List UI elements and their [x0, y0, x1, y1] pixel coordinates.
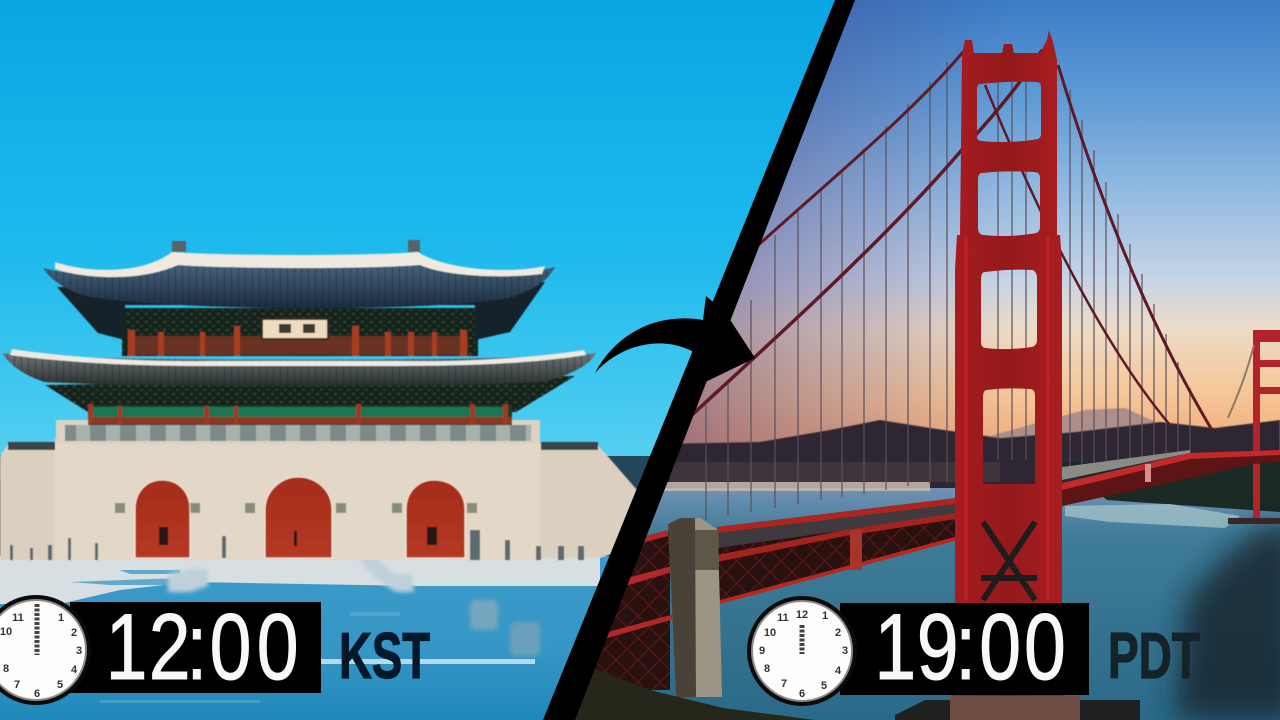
digital time 12:00: 12:00 — [106, 595, 299, 700]
panel: Seoul daytime scene — [0, 0, 860, 720]
clock icon: 8 — [764, 663, 770, 675]
stone parapet — [56, 420, 540, 444]
tower base and rocks — [895, 696, 1140, 720]
digital time background — [70, 602, 321, 693]
clock icon: 1 — [58, 612, 64, 624]
far bridge tower — [1228, 330, 1280, 524]
clock icon: 11 — [777, 612, 789, 624]
side walls — [0, 444, 637, 560]
distant dark building — [0, 455, 700, 490]
cross bracing — [981, 522, 1037, 600]
white lower ridge — [10, 349, 586, 366]
upper storey — [122, 308, 478, 356]
clock icon: 2 — [835, 627, 841, 639]
zone label PDT: PDT — [1108, 619, 1200, 692]
time panel: San Francisco — [747, 595, 1200, 706]
concrete pier — [668, 518, 722, 697]
clock icon: 3 — [76, 645, 82, 657]
panel: San Francisco dusk scene — [550, 0, 1280, 720]
time panel: Seoul — [0, 595, 430, 705]
zone label KST: KST — [339, 619, 430, 692]
upper roof tiles — [43, 240, 555, 308]
clock icon: 10 — [0, 626, 12, 638]
clock icon: 9 — [759, 645, 765, 657]
black diagonal divider — [543, 0, 855, 720]
main cables — [680, 50, 1212, 430]
clock icon: 4 — [71, 664, 78, 676]
clock icon — [0, 595, 91, 705]
tower bright stripes — [966, 236, 1048, 600]
clock icon: 10 — [764, 627, 776, 639]
clock icon: 6 — [34, 688, 40, 700]
palace gate — [0, 240, 637, 560]
clock icon: 11 — [12, 612, 24, 624]
main bridge tower — [952, 30, 1064, 720]
upper eaves underside — [57, 282, 545, 340]
suspender ropes — [706, 62, 1190, 520]
clock icon: 7 — [781, 678, 787, 690]
left approach lattice — [590, 530, 670, 690]
far shore under bridge — [1060, 462, 1280, 512]
clock icon — [747, 596, 857, 706]
clock icon: 3 — [842, 645, 848, 657]
arched red doors — [135, 477, 465, 558]
clock icon: 2 — [71, 627, 77, 639]
far span — [1062, 450, 1280, 506]
green and red lower storey — [88, 404, 512, 425]
clock icon: 6 — [799, 688, 805, 700]
bridge deck truss — [590, 450, 1280, 690]
bay water — [646, 462, 1280, 720]
signboard — [261, 318, 329, 340]
main stone wall — [55, 438, 540, 560]
foreground hillside — [575, 669, 814, 720]
dusk sky — [682, 0, 1280, 450]
clock icon: 4 — [835, 665, 842, 677]
dark shadow on the water — [1175, 526, 1280, 720]
digital time 19:00: 19:00 — [874, 595, 1066, 700]
clock icon: 12 — [796, 609, 808, 621]
clock icon: 5 — [57, 679, 63, 691]
plaza ground — [0, 554, 660, 720]
lower roof tiles — [2, 349, 596, 386]
clock icon: 8 — [3, 663, 9, 675]
blue sky — [0, 0, 860, 470]
curved arrow from Seoul to San Francisco — [595, 296, 755, 387]
clock icon: 1 — [822, 610, 828, 622]
digital time background — [840, 603, 1089, 695]
wall small windows — [115, 503, 477, 513]
main span truss — [718, 498, 955, 600]
clock icon: 5 — [821, 680, 827, 692]
clock icon: 7 — [14, 679, 20, 691]
distant hills — [660, 408, 1280, 490]
white roof ridge — [55, 252, 545, 277]
stone guardians — [10, 530, 584, 560]
lower eaves underside — [45, 376, 575, 412]
